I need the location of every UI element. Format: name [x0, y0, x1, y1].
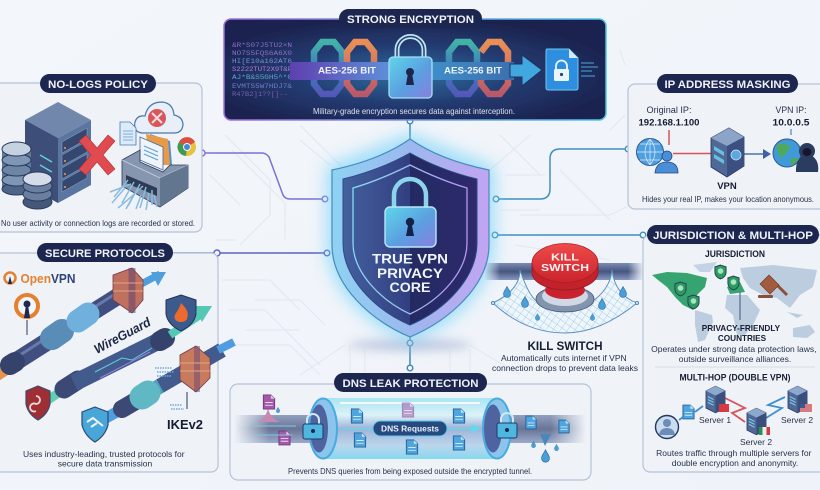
VPN IP label: VPN IP: [776, 105, 806, 115]
panel: IP address masking [628, 74, 820, 209]
encryption code column: S2222TUT2X9T&F [232, 66, 292, 73]
heading pill: strong encryption [339, 9, 482, 28]
IKEv2 label [167, 392, 203, 432]
caption: protocols: Uses industry-leading, trusted protocols for [23, 449, 185, 459]
original IP label: 192.168.1.100 [638, 118, 700, 128]
icon: central padlock [389, 36, 432, 98]
DNS requests label: DNS Requests [381, 424, 439, 434]
privacy-friendly label: COUNTRIES [718, 334, 767, 343]
padded band left with label: AES-256 BIT [318, 66, 377, 76]
icon: flame shield [166, 295, 196, 331]
panel: strong encryption [224, 9, 606, 120]
panel: secure protocols [0, 243, 234, 472]
heading pill: DNS leak protection: DNS LEAK PROTECTION [342, 378, 479, 390]
jurisdiction description: outside surveillance alliances. [679, 354, 791, 364]
VPN label: VPN [717, 181, 737, 192]
server labels: Server 2 [781, 415, 813, 425]
encryption code column [232, 42, 292, 98]
icon: server 2 right [788, 386, 812, 413]
WireGuard label: WireGuard [91, 314, 154, 357]
heading pill: jurisdiction and multi-hop [647, 225, 819, 244]
encryption code column: &R*S07J5TU2×N [232, 42, 292, 49]
icon: server 1 [706, 386, 729, 413]
icon: VPN server [711, 128, 744, 177]
tunnel files [351, 403, 465, 454]
icon: file [683, 405, 694, 419]
pipe: IKEv2 tunnel [104, 342, 234, 419]
icon: arrow [510, 55, 542, 86]
DNS flow arrow [342, 425, 479, 432]
icon: server rack [25, 102, 91, 203]
map pins [675, 265, 740, 320]
caption: protocols: secure data transmission [58, 458, 153, 468]
red button [532, 244, 598, 290]
icon: red shield [26, 386, 50, 420]
heading pill: IP address masking: IP ADDRESS MASKING [664, 79, 790, 91]
multi-hop subheading: MULTI-HOP (DOUBLE VPN) [680, 372, 790, 382]
heading pill: IP address masking [657, 74, 798, 93]
icon: paper shredder [122, 134, 188, 207]
world map [652, 262, 817, 342]
masking link lines [669, 129, 791, 159]
heading pill: DNS leak protection [334, 373, 487, 392]
server labels [699, 415, 813, 447]
kill switch heading: KILL SWITCH [528, 339, 602, 353]
icon: locked document [546, 49, 598, 90]
kill switch description: connection drops to prevent data leaks [492, 363, 638, 373]
caption: DNS: Prevents DNS queries from being exposed outside the encrypted tunnel. [288, 466, 532, 476]
icon: globe with user [636, 138, 678, 173]
panel: jurisdiction and multi-hop [643, 225, 820, 472]
leak right with files and drops [526, 416, 569, 462]
VPN IP label [772, 105, 810, 128]
heading pill: no-logs policy [40, 74, 156, 93]
heading pill: secure protocols: SECURE PROTOCOLS [45, 248, 165, 260]
band right with label [430, 42, 514, 94]
glass tunnel [309, 398, 511, 459]
icon: blocked cloud [135, 102, 183, 133]
encryption code column: HI[E10a162AT6 [232, 58, 292, 65]
panel: DNS leak protection [230, 373, 591, 480]
icon: red cross [79, 135, 115, 175]
encryption code column: EVMTS5W7HDJ7& [232, 83, 292, 90]
icon: gavel [758, 275, 787, 298]
icon: tunnel locks [303, 413, 517, 439]
leak left with files [250, 395, 296, 445]
icon: brick wall bottom [180, 346, 210, 392]
icon: handshake shield [82, 407, 108, 442]
DNS pipe band [234, 415, 586, 443]
jurisdiction description: Operates under strong data protection laws, [651, 344, 816, 354]
central shield: PRIVACY [377, 265, 444, 281]
icon: OpenVPN keyhole [16, 295, 38, 335]
icon: browser logo [177, 137, 196, 156]
original IP label [638, 105, 700, 128]
server labels: Server 1 [699, 415, 731, 425]
central shield: CORE [390, 279, 430, 295]
kill switch [484, 244, 644, 373]
pipe: OpenVPN tunnel [0, 272, 166, 375]
shredded paper strips [110, 180, 157, 210]
safety net [492, 270, 638, 333]
icon: brick wall top [113, 268, 143, 313]
heading pill: secure protocols [37, 243, 173, 262]
original IP label: Original IP: [646, 105, 692, 115]
icon: globe with hooded figure [773, 139, 818, 172]
severed pipe [484, 263, 644, 280]
water drops [504, 286, 626, 320]
heading pill: jurisdiction and multi-hop: JURISDICTION & MULTI-HOP [653, 230, 813, 242]
connector lines [172, 118, 646, 371]
caption: encryption: Military-grade encryption secures data against interception. [313, 106, 515, 116]
encryption code column: R47B2]1??[]-- [232, 91, 288, 98]
OpenVPN logo and name: OpenVPN [20, 271, 76, 286]
multi-hop description: double encryption and anonymity. [672, 458, 798, 468]
IKEv2 label: IKEv2 [167, 418, 203, 432]
padded band left with label [290, 62, 390, 80]
VPN IP label: 10.0.0.5 [772, 118, 810, 128]
red button: SWITCH [541, 262, 589, 274]
icon: user [656, 416, 678, 438]
panel: no-logs policy [0, 74, 202, 232]
privacy-friendly label: PRIVACY-FRIENDLY [702, 324, 781, 333]
caption: no logs: No user activity or connection logs are recorded or stored. [1, 218, 195, 228]
icon: server 2 middle [747, 408, 770, 435]
pipe: WireGuard tunnel [48, 306, 212, 400]
heading pill: no-logs policy: NO-LOGS POLICY [48, 79, 149, 91]
kill switch description: Automatically cuts internet if VPN [501, 353, 627, 363]
multi-hop diagram [656, 386, 813, 447]
band right with label: AES-256 BIT [444, 66, 503, 76]
route arrows [679, 397, 785, 422]
multi-hop description: Routes traffic through multiple servers for [656, 448, 812, 458]
icon: document [120, 122, 136, 145]
DNS requests label [373, 421, 447, 436]
shield title: TRUE VPN [372, 250, 448, 266]
encryption code column: NO7S5FQS6A6X0 [232, 50, 292, 57]
icon: shield padlock [385, 179, 436, 247]
icon: database stacks [2, 142, 52, 209]
red button: KILL [551, 252, 580, 264]
chain links left [314, 42, 374, 94]
encryption code column: AJ*B&S5GH5^*0 [232, 73, 292, 81]
jurisdiction subheading: JURISDICTION [705, 249, 765, 259]
heading pill: strong encryption: STRONG ENCRYPTION [347, 14, 474, 26]
button base [536, 281, 594, 312]
server labels: Server 2 [740, 437, 772, 447]
central shield [332, 139, 489, 351]
